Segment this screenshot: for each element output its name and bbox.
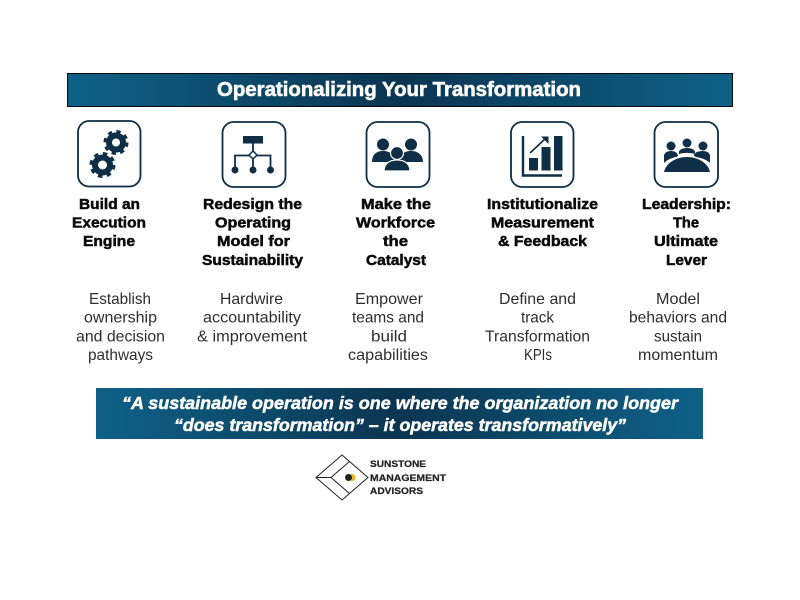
column 2 heading: Redesign the [203,197,302,213]
quote text: “A sustainable operation is one where the organization no longer [122,393,679,413]
column 3 heading: Catalyst [366,253,426,269]
column 4 description: Transformation [485,328,590,346]
column 1 heading: Build an [79,197,140,213]
column 5 heading: Leadership: [642,197,731,213]
column 2 heading: Model for [217,234,290,250]
column 3 heading: the [383,234,408,250]
column 4 heading: Measurement [491,216,594,232]
column 5 description [629,291,727,364]
column 5 heading: The [673,216,699,232]
column 2 description: & improvement [197,328,308,346]
column 3 heading: Workforce [356,216,435,232]
column 4 heading: & Feedback [498,234,588,250]
quote text [122,393,679,435]
icon: leadership table [654,122,718,187]
icon: growth chart [511,122,574,187]
column 1 heading [72,197,146,250]
icon: team [366,122,430,187]
column 5 heading [642,197,731,269]
title: Operationalizing Your Transformation [217,79,581,101]
column 3 description: teams and [352,310,424,326]
column 5 heading: Ultimate [654,234,718,250]
logo: Sunstone Management Advisors [316,455,447,500]
column 3 description: build [371,328,407,346]
column 3 description [348,291,428,364]
column 1 heading: Engine [83,234,135,250]
column 1 description: and decision [76,328,165,346]
logo mark [316,455,368,500]
column 4 description: KPIs [524,347,552,364]
column 2 description [197,291,308,346]
column 2 description: Hardwire [220,291,283,308]
column 1 description: ownership [84,310,157,326]
column 5 description: Model [656,291,700,308]
column 5 description: momentum [638,347,718,364]
logo wordmark: MANAGEMENT [370,473,447,483]
title banner [68,74,732,106]
column 4 description: Define and [499,291,576,308]
column 1 description: Establish [89,291,151,308]
column 5 description: behaviors and [629,310,727,326]
logo wordmark [370,459,447,496]
icon: org structure [222,122,286,187]
column 3 heading [356,197,435,269]
column 4 heading: Institutionalize [487,197,598,213]
column 3 description: capabilities [348,347,428,364]
logo wordmark: ADVISORS [370,486,423,496]
quote banner [96,388,703,439]
column 1 description: pathways [88,347,153,364]
column 2 description: accountability [203,310,301,326]
column 3 description: Empower [355,291,424,308]
column 4 description: track [521,310,555,326]
quote text: “does transformation” – it operates transformatively” [174,415,626,435]
column 2 heading: Operating [215,216,291,232]
column 5 description: sustain [654,328,702,346]
column 4 description [485,291,590,364]
column 1 description [76,291,165,364]
column 2 heading [202,197,303,269]
logo wordmark: SUNSTONE [370,459,426,469]
column 2 heading: Sustainability [202,253,303,269]
column 3 heading: Make the [361,197,431,213]
icon: gears [78,121,140,186]
column 1 heading: Execution [72,216,146,232]
column 4 heading [487,197,598,250]
column 5 heading: Lever [666,253,707,269]
